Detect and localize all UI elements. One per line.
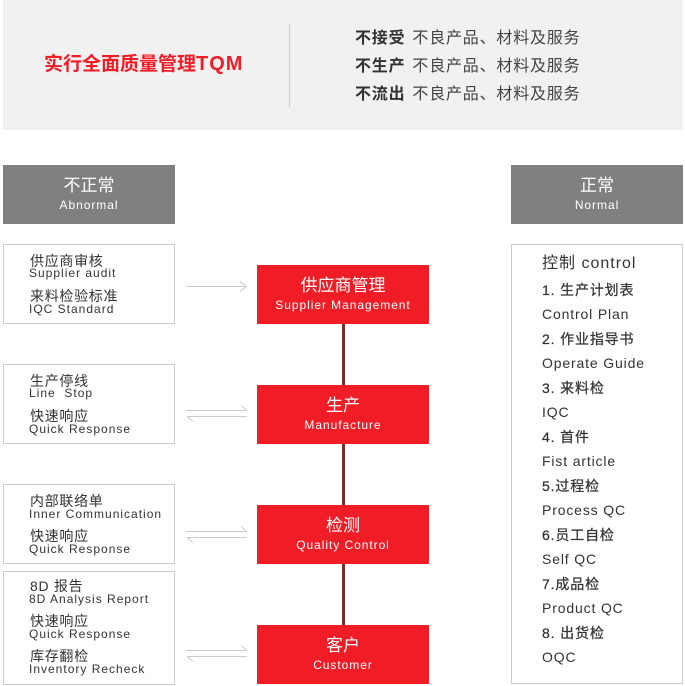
- header: normal: Normal: [575, 198, 619, 212]
- arrow: to supplier management: [186, 281, 247, 292]
- step: customer: 客户: [326, 636, 360, 655]
- header: abnormal: 不正常: [64, 176, 114, 195]
- list items: OQC: [542, 649, 576, 665]
- panel: quality abnormal actions: 快速响应: [30, 528, 89, 544]
- list items: Operate Guide: [542, 355, 645, 371]
- list items: IQC: [542, 404, 569, 420]
- connector line between process steps: [342, 324, 345, 625]
- banner line: do not produce: 不生产 不良产品、材料及服务: [355, 58, 580, 75]
- panel: production abnormal actions: 快速响应: [30, 408, 89, 424]
- list items: Product QC: [542, 600, 624, 616]
- list heading: 控制 control: [542, 255, 636, 272]
- header: normal: [511, 165, 683, 224]
- panel: supplier abnormal actions: 供应商审核: [30, 253, 104, 269]
- top banner panel: [3, 0, 683, 130]
- step: supplier management: 供应商管理: [300, 276, 386, 295]
- panel: quality abnormal actions: Quick Response: [29, 542, 131, 556]
- banner line: do not release: 不流出 不良产品、材料及服务: [355, 86, 580, 103]
- step: manufacture: [257, 385, 429, 444]
- panel: quality abnormal actions: 内部联络单: [30, 493, 104, 509]
- panel: quality abnormal actions: [3, 484, 175, 564]
- list items: Control Plan: [542, 306, 629, 322]
- panel: production abnormal actions: Quick Response: [29, 422, 131, 436]
- list items: 3. 来料检: [542, 380, 605, 396]
- list items: 6.员工自检: [542, 527, 615, 543]
- panel: customer abnormal actions: [3, 571, 175, 685]
- panel: quality abnormal actions: Inner Communication: [29, 507, 162, 521]
- panel: supplier abnormal actions: IQC Standard: [29, 302, 114, 316]
- panel: customer abnormal actions: 8D Analysis Report: [29, 592, 149, 606]
- panel: supplier abnormal actions: 来料检验标准: [30, 288, 118, 304]
- panel: customer abnormal actions: 8D 报告: [30, 578, 83, 594]
- header: abnormal: Abnormal: [60, 198, 118, 212]
- panel: customer abnormal actions: 库存翻检: [30, 648, 89, 664]
- panel: production abnormal actions: [3, 364, 175, 444]
- step: manufacture: 生产: [326, 396, 360, 415]
- step: supplier management: [257, 265, 429, 324]
- header: normal: 正常: [580, 176, 614, 195]
- banner line: do not accept: 不接受 不良产品、材料及服务: [355, 30, 580, 47]
- panel: customer abnormal actions: Quick Response: [29, 627, 131, 641]
- panel: supplier abnormal actions: Supplier audit: [29, 266, 116, 280]
- step: quality control: [257, 505, 429, 564]
- arrow: two-way quality control: [186, 526, 248, 543]
- step: quality control: Quality Control: [296, 538, 390, 552]
- list items: 7.成品检: [542, 576, 600, 592]
- list items: 2. 作业指导书: [542, 331, 634, 347]
- list items: Self QC: [542, 551, 597, 567]
- panel: supplier abnormal actions: [3, 244, 175, 324]
- panel: customer abnormal actions: 快速响应: [30, 613, 89, 629]
- step: manufacture: Manufacture: [304, 418, 382, 432]
- arrow: two-way manufacture: [186, 405, 248, 422]
- step: customer: [257, 625, 429, 684]
- header: abnormal: [3, 165, 175, 224]
- panel: customer abnormal actions: Inventory Recheck: [29, 662, 145, 676]
- list items: Fist article: [542, 453, 616, 469]
- banner title: 实行全面质量管理TQM: [44, 53, 243, 75]
- banner divider: [289, 24, 290, 107]
- panel: normal controls list: [511, 244, 683, 684]
- list items: 8. 出货检: [542, 625, 605, 641]
- list items: Process QC: [542, 502, 626, 518]
- list items: [542, 282, 645, 665]
- list items: 1. 生产计划表: [542, 282, 634, 298]
- step: quality control: 检测: [326, 516, 360, 535]
- panel: production abnormal actions: 生产停线: [30, 373, 89, 389]
- step: supplier management: Supplier Management: [275, 298, 411, 312]
- panel: production abnormal actions: Line Stop: [29, 386, 93, 400]
- arrow: two-way customer: [186, 645, 248, 662]
- step: customer: Customer: [313, 658, 373, 672]
- list items: 4. 首件: [542, 429, 590, 445]
- list items: 5.过程检: [542, 478, 600, 494]
